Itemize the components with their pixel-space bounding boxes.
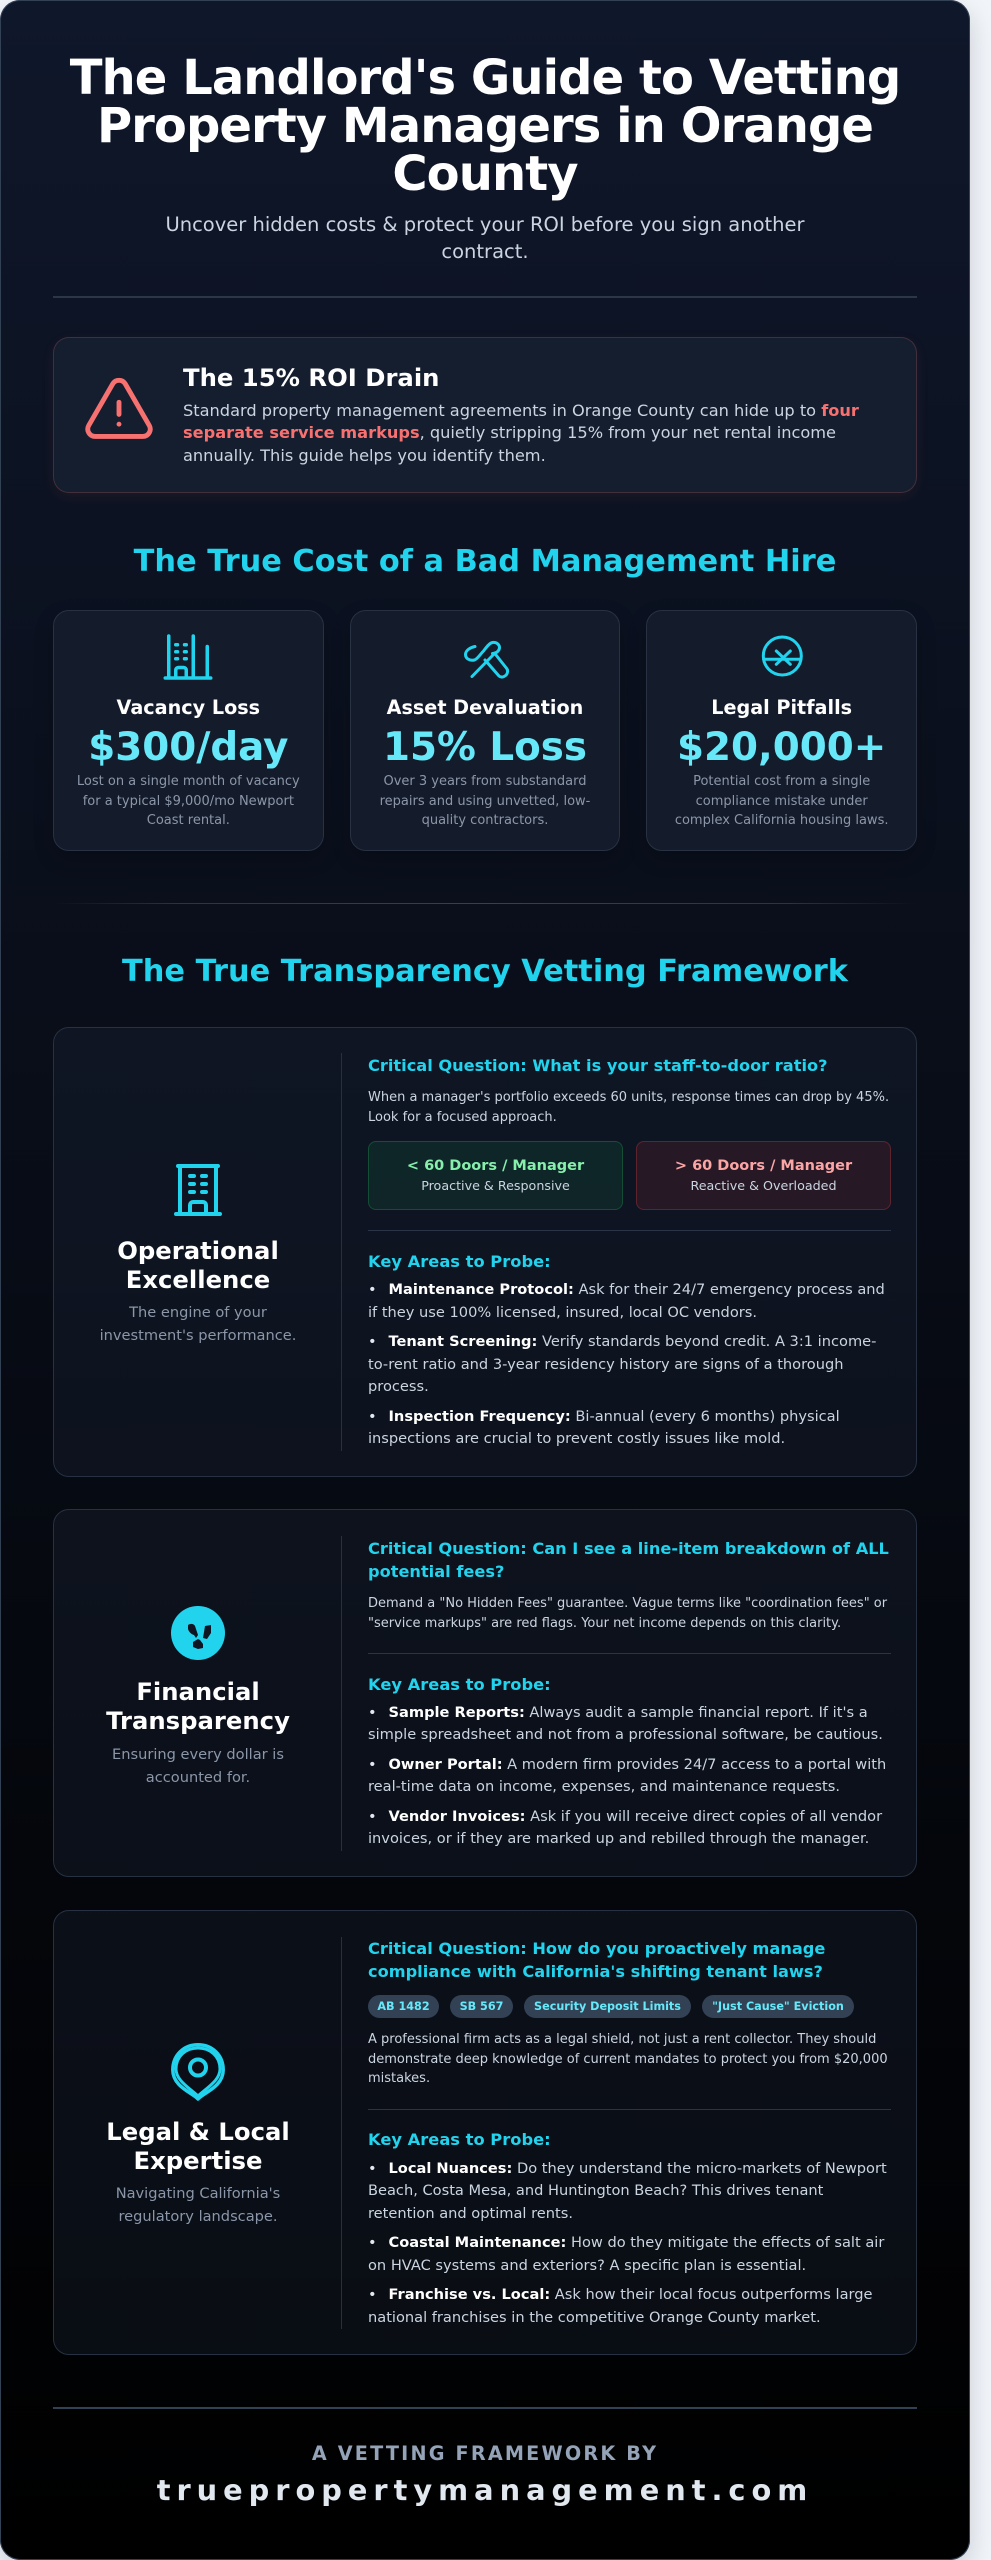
critical question: compliance with California's shifting tenant laws?	[368, 1962, 823, 1980]
icon: scales circle	[762, 636, 803, 676]
stat value: $20,000+	[677, 724, 886, 770]
callout text	[183, 401, 859, 465]
stat description: Lost on a single month of vacancy	[77, 774, 300, 789]
comparison: under 60 doors	[368, 1141, 623, 1210]
key areas list: on HVAC systems and exteriors? A specific plan is essential.	[368, 2257, 806, 2274]
panel title: Transparency	[106, 1706, 290, 1735]
callout heading: The 15% ROI Drain	[183, 363, 439, 392]
callout text: Standard property management agreements in Orange County can hide up to four	[183, 401, 859, 420]
panel subtitle: regulatory landscape.	[118, 2208, 278, 2224]
stat card: vacancy loss	[53, 610, 324, 851]
key areas list: invoices, or if they are marked up and rebilled through the manager.	[368, 1830, 869, 1847]
key areas list	[368, 1281, 885, 1447]
subtitle: contract.	[441, 240, 529, 262]
panel title: Operational	[117, 1236, 279, 1264]
panel title: Legal & Local	[106, 2117, 290, 2146]
key areas list: if they use 100% licensed, insured, local OC vendors.	[368, 1304, 757, 1321]
stat label: Asset Devaluation	[387, 696, 583, 719]
tag: AB 1482: AB 1482	[377, 2000, 430, 2013]
key areas list: Sample Reports: Always audit a sample financial report. If it's a	[388, 1704, 868, 1721]
stat description: compliance mistake under	[696, 794, 868, 809]
footer: website: truepropertymanagement.com	[157, 2473, 813, 2507]
critical question: Critical Question: Can I see a line-item breakdown of ALL	[368, 1538, 889, 1558]
tag: SB 567: SB 567	[460, 2000, 503, 2013]
stat card: asset devaluation	[350, 610, 620, 851]
key areas list: national franchises in the competitive Orange County market.	[368, 2309, 821, 2326]
question explanation: "service markups" are red flags. Your net income depends on this clarity.	[368, 1616, 841, 1630]
panel subtitle	[112, 1746, 284, 1786]
key areas heading: Key Areas to Probe:	[368, 1675, 551, 1694]
key areas list	[368, 1704, 886, 1847]
key areas list: Tenant Screening: Verify standards beyond credit. A 3:1 income-	[388, 1333, 876, 1350]
stat value: $300/day	[88, 724, 288, 770]
callout text: separate service markups, quietly stripping 15% from your net rental income	[183, 423, 836, 442]
stat description	[380, 774, 590, 828]
key areas heading: Key Areas to Probe:	[368, 2130, 551, 2149]
question explanation	[368, 2032, 888, 2086]
panel subtitle: Ensuring every dollar is	[112, 1746, 284, 1762]
panel subtitle: Navigating California's	[116, 2184, 280, 2202]
question explanation	[368, 1596, 888, 1630]
panel title	[106, 1677, 290, 1735]
icon: tools	[464, 640, 510, 679]
footer: credit line: A VETTING FRAMEWORK BY	[312, 2442, 658, 2465]
callout text: annually. This guide helps you identify them.	[183, 446, 546, 465]
bad description: Reactive & Overloaded	[690, 1178, 837, 1193]
icon: buildings	[164, 634, 212, 680]
key areas list: inspections are crucial to prevent costly issues like mold.	[368, 1430, 785, 1447]
tag: security deposit limits	[524, 1995, 691, 2018]
good description: Proactive & Responsive	[421, 1178, 570, 1193]
stat description: repairs and using unvetted, low-	[380, 794, 590, 809]
subtitle: Uncover hidden costs & protect your ROI before you sign another	[165, 212, 805, 236]
panel: financial transparency	[53, 1509, 917, 1877]
bad label: > 60 Doors / Manager	[675, 1158, 852, 1174]
title: The Landlord's Guide to Vetting	[70, 50, 900, 106]
question explanation: Look for a focused approach.	[368, 1110, 557, 1124]
key areas list: simple spreadsheet and not from a professional software, be cautious.	[368, 1726, 883, 1743]
key areas list: process.	[368, 1378, 429, 1395]
tag: just cause eviction: "Just Cause" Eviction	[712, 2000, 844, 2013]
key areas list: Maintenance Protocol: Ask for their 24/7 emergency process and	[388, 1281, 885, 1298]
tag: SB 567	[450, 1995, 513, 2018]
icon: office building	[174, 1164, 222, 1216]
heading: true cost: The True Cost of a Bad Management Hire	[134, 544, 836, 579]
good label: < 60 Doors / Manager	[407, 1158, 584, 1174]
panel subtitle: investment's performance.	[100, 1326, 296, 1344]
panel subtitle	[100, 1304, 296, 1344]
panel: operational excellence	[53, 1027, 917, 1477]
key areas list: Coastal Maintenance: How do they mitigate the effects of salt air	[388, 2234, 884, 2251]
title: County	[392, 146, 578, 202]
stat label: Legal Pitfalls	[711, 696, 852, 719]
stat description: Over 3 years from substandard	[383, 774, 586, 789]
panel: legal and local expertise	[53, 1910, 917, 2355]
question explanation	[368, 1090, 889, 1124]
key areas list: Beach, Costa Mesa, and Huntington Beach? This drives tenant	[368, 2182, 823, 2199]
key areas list: real-time data on income, expenses, and maintenance requests.	[368, 1778, 840, 1795]
key areas heading: Key Areas to Probe:	[368, 1252, 551, 1271]
title	[70, 50, 900, 202]
tag: AB 1482	[368, 1995, 439, 2018]
key areas list: to-rent ratio and 3-year residency history are signs of a thorough	[368, 1356, 843, 1373]
panel subtitle: accounted for.	[146, 1768, 250, 1786]
subtitle	[165, 212, 805, 262]
panel subtitle: The engine of your	[129, 1304, 267, 1320]
key areas list: Local Nuances: Do they understand the micro-markets of Newport	[388, 2160, 887, 2177]
question explanation: When a manager's portfolio exceeds 60 units, response times can drop by 45%.	[368, 1090, 889, 1105]
stat card: legal pitfalls	[646, 610, 917, 851]
key areas list: Inspection Frequency: Bi-annual (every 6 months) physical	[388, 1408, 840, 1425]
key areas list: Franchise vs. Local: Ask how their local focus outperforms large	[388, 2286, 873, 2303]
stat description: quality contractors.	[422, 813, 548, 828]
stat label: Vacancy Loss	[117, 696, 260, 719]
panel title	[106, 2117, 290, 2175]
critical question: Critical Question: What is your staff-to-door ratio?	[368, 1056, 828, 1074]
critical question: potential fees?	[368, 1562, 504, 1580]
panel title	[117, 1236, 279, 1294]
callout: the 15% ROI drain	[53, 337, 917, 493]
stat description: for a typical $9,000/mo Newport	[83, 794, 294, 809]
question explanation: A professional firm acts as a legal shield, not just a rent collector. They should	[368, 2032, 876, 2047]
stat description: complex California housing laws.	[675, 813, 888, 828]
stat value: 15% Loss	[383, 724, 587, 770]
icon: warning triangle	[85, 378, 153, 439]
critical question	[368, 1538, 889, 1580]
panel title: Expertise	[133, 2146, 262, 2175]
question explanation: demonstrate deep knowledge of current mandates to protect you from $20,000	[368, 2052, 888, 2067]
stat description: Potential cost from a single	[693, 774, 870, 789]
key areas list: retention and optimal rents.	[368, 2205, 573, 2222]
stat description	[77, 774, 300, 828]
key areas list	[368, 2160, 887, 2326]
tag: security deposit limits: Security Deposit Limits	[534, 2000, 681, 2013]
panel title: Excellence	[126, 1264, 270, 1294]
icon: map pin	[171, 2043, 225, 2101]
title: Property Managers in Orange	[97, 98, 873, 154]
panel subtitle	[116, 2184, 280, 2224]
question explanation: mistakes.	[368, 2071, 430, 2086]
stat description	[675, 774, 888, 828]
stat description: Coast rental.	[147, 813, 230, 828]
question explanation: Demand a "No Hidden Fees" guarantee. Vague terms like "coordination fees" or	[368, 1596, 887, 1611]
heading: vetting framework: The True Transparency Vetting Framework	[122, 954, 848, 989]
comparison: over 60 doors	[636, 1141, 891, 1210]
panel title: Financial	[136, 1677, 260, 1706]
critical question	[368, 1938, 825, 1980]
icon: money circle	[171, 1606, 225, 1660]
key areas list: Owner Portal: A modern firm provides 24/7 access to a portal with	[388, 1756, 886, 1773]
critical question: Critical Question: How do you proactively manage	[368, 1938, 825, 1958]
key areas list: Vendor Invoices: Ask if you will receive direct copies of all vendor	[388, 1808, 882, 1825]
tag: just cause eviction	[702, 1995, 854, 2018]
